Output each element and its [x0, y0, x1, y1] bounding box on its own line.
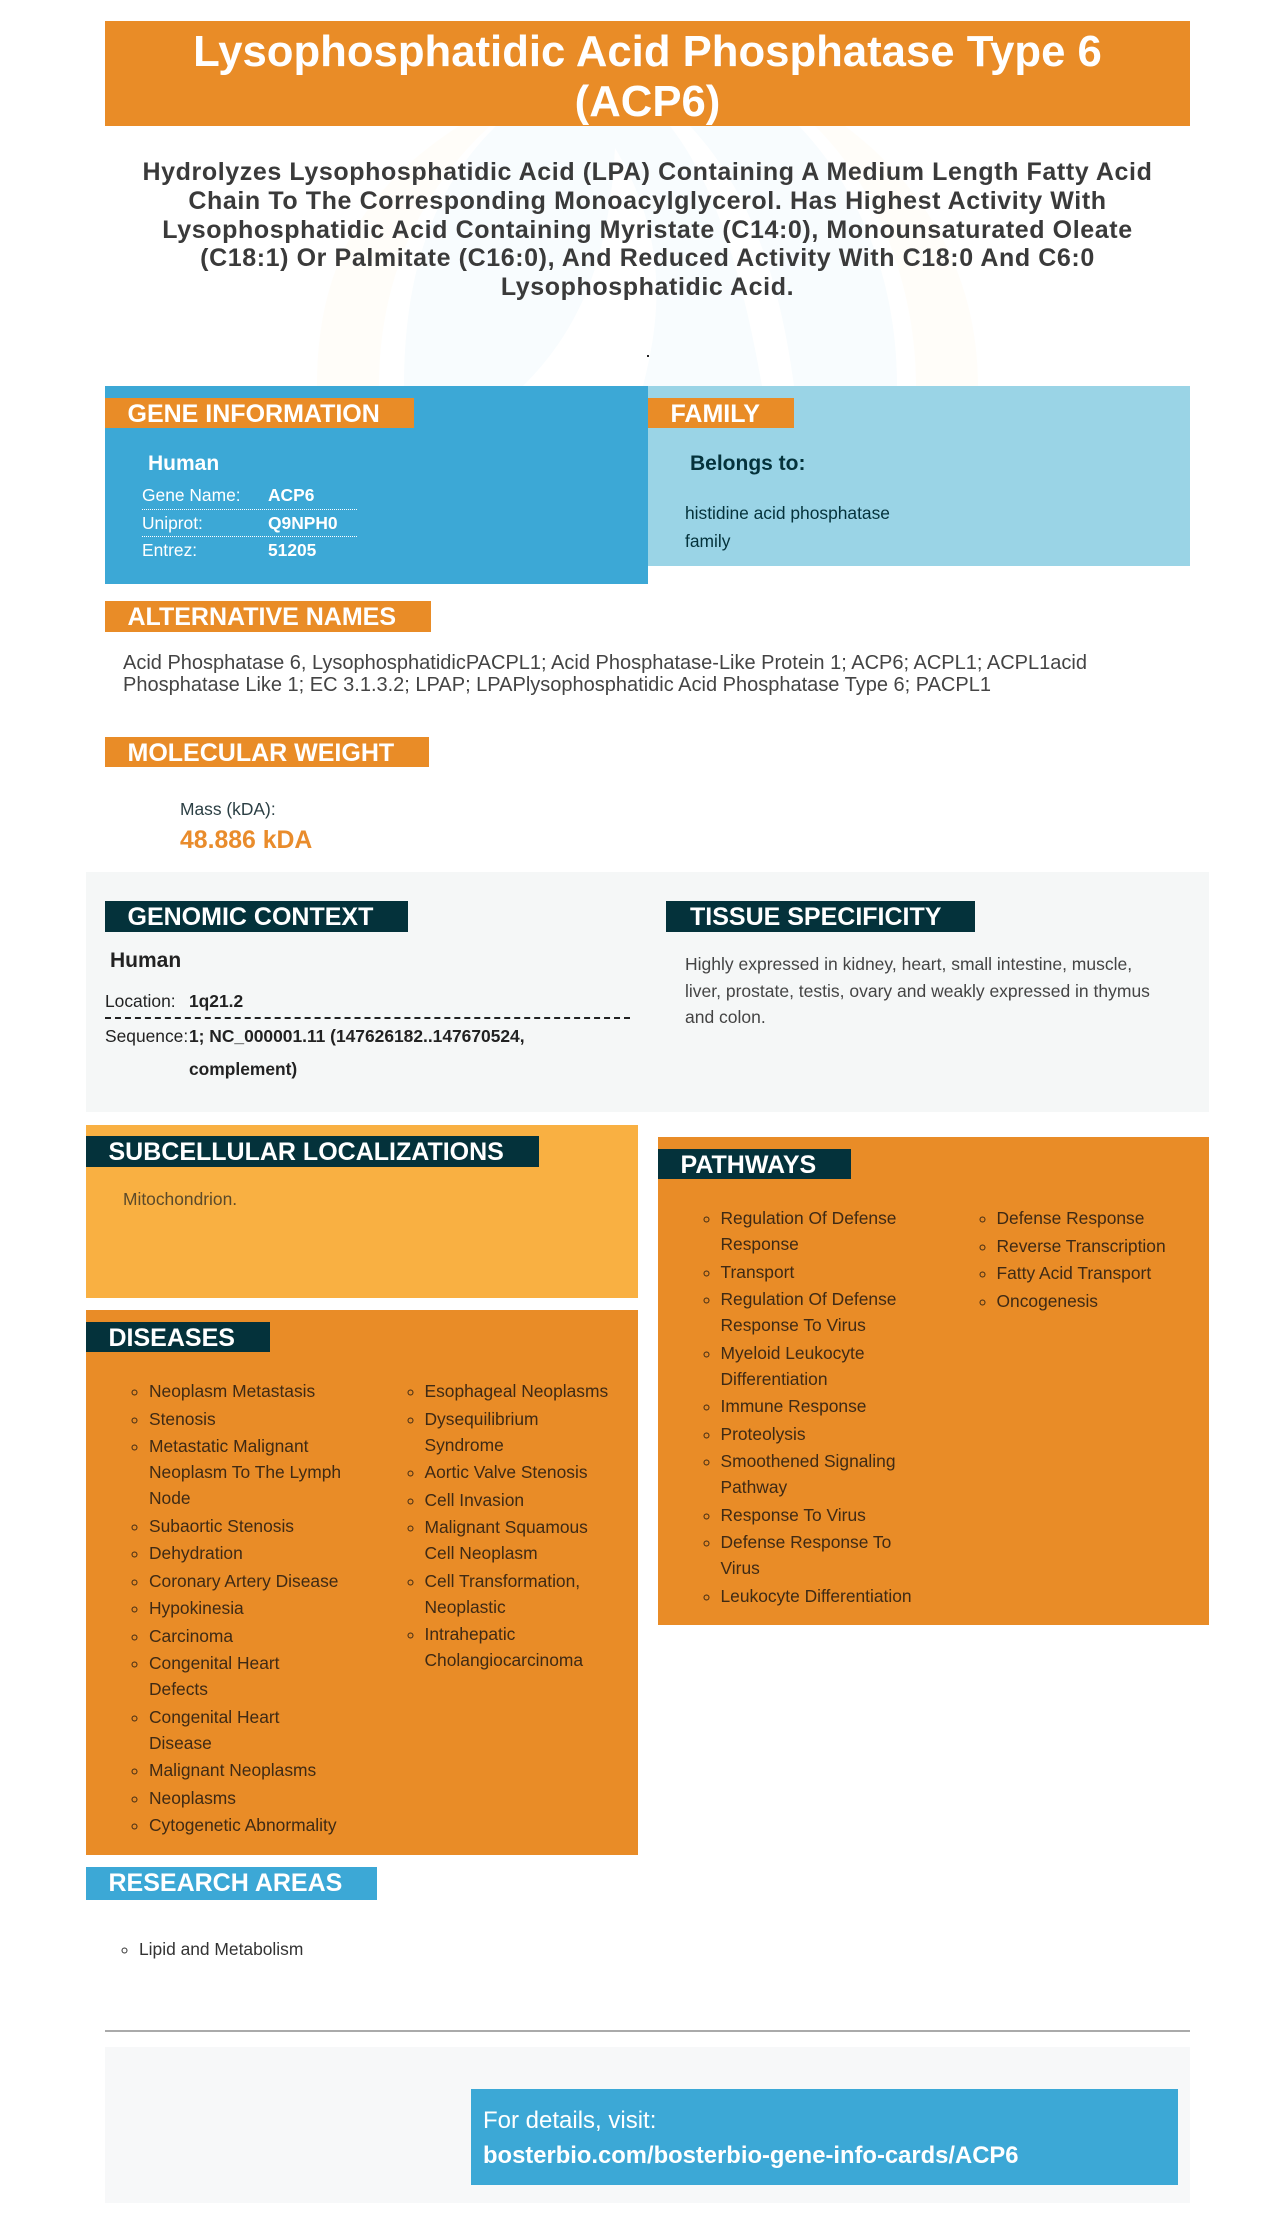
- molecular weight block: [180, 799, 312, 854]
- belongs to label: Belongs to:: [690, 452, 806, 475]
- pathway list column 1: Virus: [720, 1558, 760, 1578]
- disease list column 2: Cell Transformation,: [424, 1570, 580, 1590]
- pathway list column 1: Leukocyte Differentiation: [720, 1586, 912, 1606]
- heading: gene information: GENE INFORMATION: [128, 400, 380, 428]
- footer divider: [105, 2030, 1190, 2032]
- disease list column 1: Subaortic Stenosis: [149, 1516, 294, 1536]
- disease list column 2: Cholangiocarcinoma: [424, 1650, 583, 1670]
- callout: details link: [471, 2089, 1178, 2185]
- disease list column 2: Cell Neoplasm: [424, 1543, 538, 1563]
- mass value: 48.886 kDA: [180, 827, 312, 854]
- disease list column 1: Congenital Heart: [149, 1653, 280, 1673]
- location row: [105, 991, 243, 1011]
- location row: Location:: [105, 991, 176, 1011]
- protein description: Hydrolyzes Lysophosphatidic Acid (LPA) Containing A Medium Length Fatty Acid: [142, 158, 1152, 186]
- heading: family: FAMILY: [670, 400, 760, 428]
- panel: footer: [105, 2047, 1190, 2203]
- species label: Human: [148, 452, 219, 475]
- panel: diseases: [86, 1310, 638, 1855]
- disease list column 1: Node: [149, 1488, 191, 1508]
- disease list column 1: Neoplasm Metastasis: [149, 1381, 315, 1401]
- disease list column 2: Malignant Squamous: [424, 1517, 588, 1537]
- pathway list column 1: Response: [720, 1234, 799, 1254]
- disease list column 1: Dehydration: [149, 1543, 243, 1563]
- tissue specificity text: [685, 954, 1150, 1027]
- protein description: Lysophosphatidic Acid Containing Myristate (C14:0), Monounsaturated Oleate: [162, 216, 1133, 244]
- pathway list column 1: Response To Virus: [720, 1504, 866, 1524]
- protein description: [142, 158, 1152, 301]
- stray dot: [647, 355, 649, 357]
- mass label: Mass (kDA):: [180, 799, 276, 819]
- pathway list column 1: Transport: [720, 1262, 794, 1282]
- panel: family: [648, 386, 1190, 566]
- heading: alternative names: ALTERNATIVE NAMES: [128, 603, 396, 631]
- sequence row: 1; NC_000001.11 (147626182..147670524,: [189, 1026, 525, 1046]
- pathway list column 2: Defense Response: [996, 1208, 1144, 1228]
- heading: subcellular localizations: SUBCELLULAR LOCALIZATIONS: [108, 1138, 504, 1166]
- family text: family: [685, 531, 730, 551]
- disease list column 1: Metastatic Malignant: [149, 1436, 308, 1456]
- gene name row: Gene Name:: [142, 485, 241, 505]
- title banner: (ACP6): [575, 77, 720, 126]
- title banner: Lysophosphatidic Acid Phosphatase Type 6: [193, 27, 1102, 76]
- tissue specificity text: liver, prostate, testis, ovary and weakly expressed in thymus: [685, 980, 1150, 1000]
- panel: genomic context and tissue specificity: 1q21.2: [189, 991, 243, 1011]
- pathway list column 2: Reverse Transcription: [996, 1236, 1166, 1256]
- heading: research areas: RESEARCH AREAS: [108, 1869, 342, 1897]
- disease list column 2: Syndrome: [424, 1434, 504, 1454]
- pathway list column 1: Proteolysis: [720, 1424, 806, 1444]
- disease list column 2: Cell Invasion: [424, 1490, 524, 1510]
- disease list column 1: Disease: [149, 1732, 212, 1752]
- disease list column 1: Carcinoma: [149, 1626, 233, 1646]
- heading: research areas: [86, 1867, 377, 1900]
- heading: family: [648, 398, 794, 428]
- title banner: [105, 21, 1190, 126]
- heading: tissue specificity: TISSUE SPECIFICITY: [690, 903, 941, 931]
- disease list column 1: Hypokinesia: [149, 1598, 244, 1618]
- background watermark logo: [290, 126, 1010, 386]
- heading: molecular weight: MOLECULAR WEIGHT: [128, 739, 394, 767]
- heading: diseases: DISEASES: [108, 1324, 235, 1352]
- entrez row: Entrez:: [142, 540, 197, 560]
- sequence row: Sequence:: [105, 1026, 188, 1046]
- entrez row: [142, 540, 316, 560]
- alternative names text: Phosphatase Like 1; EC 3.1.3.2; LPAP; LPAPlysophosphatidic Acid Phosphatase Type 6; PACPL1: [123, 674, 991, 696]
- heading: diseases: [86, 1322, 270, 1352]
- dashed divider: [105, 1017, 630, 1019]
- disease list column 1: Congenital Heart: [149, 1706, 280, 1726]
- panel: subcellular localizations: [86, 1125, 638, 1298]
- disease list column 2: Intrahepatic: [424, 1624, 515, 1644]
- pathway list column 2: Fatty Acid Transport: [996, 1263, 1151, 1283]
- disease list column 1: Cytogenetic Abnormality: [149, 1815, 337, 1835]
- pathway list column 1: Regulation Of Defense: [720, 1289, 896, 1309]
- panel: genomic context and tissue specificity: [86, 872, 1209, 1112]
- tissue specificity text: Highly expressed in kidney, heart, small intestine, muscle,: [685, 954, 1132, 974]
- pathway list column 2: Oncogenesis: [996, 1290, 1098, 1310]
- pathway list column 1: Immune Response: [720, 1396, 866, 1416]
- panel: gene information: [105, 386, 648, 584]
- tissue specificity text: and colon.: [685, 1007, 766, 1027]
- disease list column 2: [408, 1381, 608, 1670]
- details url: bosterbio.com/bosterbio-gene-info-cards/ACP6: [483, 2142, 1018, 2169]
- pathway list column 1: Regulation Of Defense: [720, 1208, 896, 1228]
- disease list column 2: Dysequilibrium: [424, 1408, 539, 1428]
- uniprot row: Q9NPH0: [268, 513, 338, 533]
- disease list column 1: Defects: [149, 1679, 208, 1699]
- pathway list column 2: [980, 1208, 1166, 1310]
- disease list column 1: Coronary Artery Disease: [149, 1570, 338, 1590]
- disease list column 1: Malignant Neoplasms: [149, 1760, 316, 1780]
- details label: For details, visit:: [483, 2107, 656, 2134]
- disease list column 1: [132, 1381, 341, 1835]
- entrez row: 51205: [268, 540, 316, 560]
- uniprot row: Uniprot:: [142, 513, 203, 533]
- family text: [685, 503, 890, 551]
- disease list column 1: Neoplasm To The Lymph: [149, 1462, 341, 1482]
- disease list column 1: Stenosis: [149, 1408, 216, 1428]
- protein description: Chain To The Corresponding Monoacylglycerol. Has Highest Activity With: [188, 187, 1107, 215]
- disease list column 2: Aortic Valve Stenosis: [424, 1462, 588, 1482]
- protein description: (C18:1) Or Palmitate (C16:0), And Reduced Activity With C18:0 And C6:0: [200, 244, 1095, 272]
- gene name row: [142, 482, 357, 510]
- disease list column 2: Esophageal Neoplasms: [424, 1381, 608, 1401]
- localization text: Mitochondrion.: [123, 1189, 237, 1209]
- pathway list column 1: Response To Virus: [720, 1315, 866, 1335]
- alternative names text: [123, 652, 1087, 696]
- research areas list: Lipid and Metabolism: [139, 1939, 303, 1959]
- disease list column 2: Neoplastic: [424, 1596, 506, 1616]
- species label: Human: [110, 949, 181, 972]
- uniprot row: [142, 510, 357, 537]
- heading: genomic context: GENOMIC CONTEXT: [128, 903, 373, 931]
- disease list column 1: Neoplasms: [149, 1788, 236, 1808]
- heading: pathways: [658, 1149, 851, 1179]
- sequence row: complement): [189, 1059, 297, 1079]
- family text: histidine acid phosphatase: [685, 503, 890, 523]
- gene name row: ACP6: [268, 485, 314, 505]
- protein description: Lysophosphatidic Acid.: [501, 273, 794, 301]
- alternative names text: Acid Phosphatase 6, LysophosphatidicPACPL1; Acid Phosphatase-Like Protein 1; ACP6; ACPL1; ACPL1acid: [123, 652, 1087, 674]
- heading: pathways: PATHWAYS: [680, 1151, 816, 1179]
- pathway list column 1: Differentiation: [720, 1368, 828, 1388]
- sequence row: [105, 1026, 525, 1079]
- panel: pathways: [658, 1137, 1209, 1625]
- pathway list column 1: Myeloid Leukocyte: [720, 1342, 865, 1362]
- pathway list column 1: Defense Response To: [720, 1532, 891, 1552]
- pathway list column 1: Smoothened Signaling: [720, 1451, 896, 1471]
- pathway list column 1: [704, 1208, 912, 1606]
- pathway list column 1: Pathway: [720, 1477, 787, 1497]
